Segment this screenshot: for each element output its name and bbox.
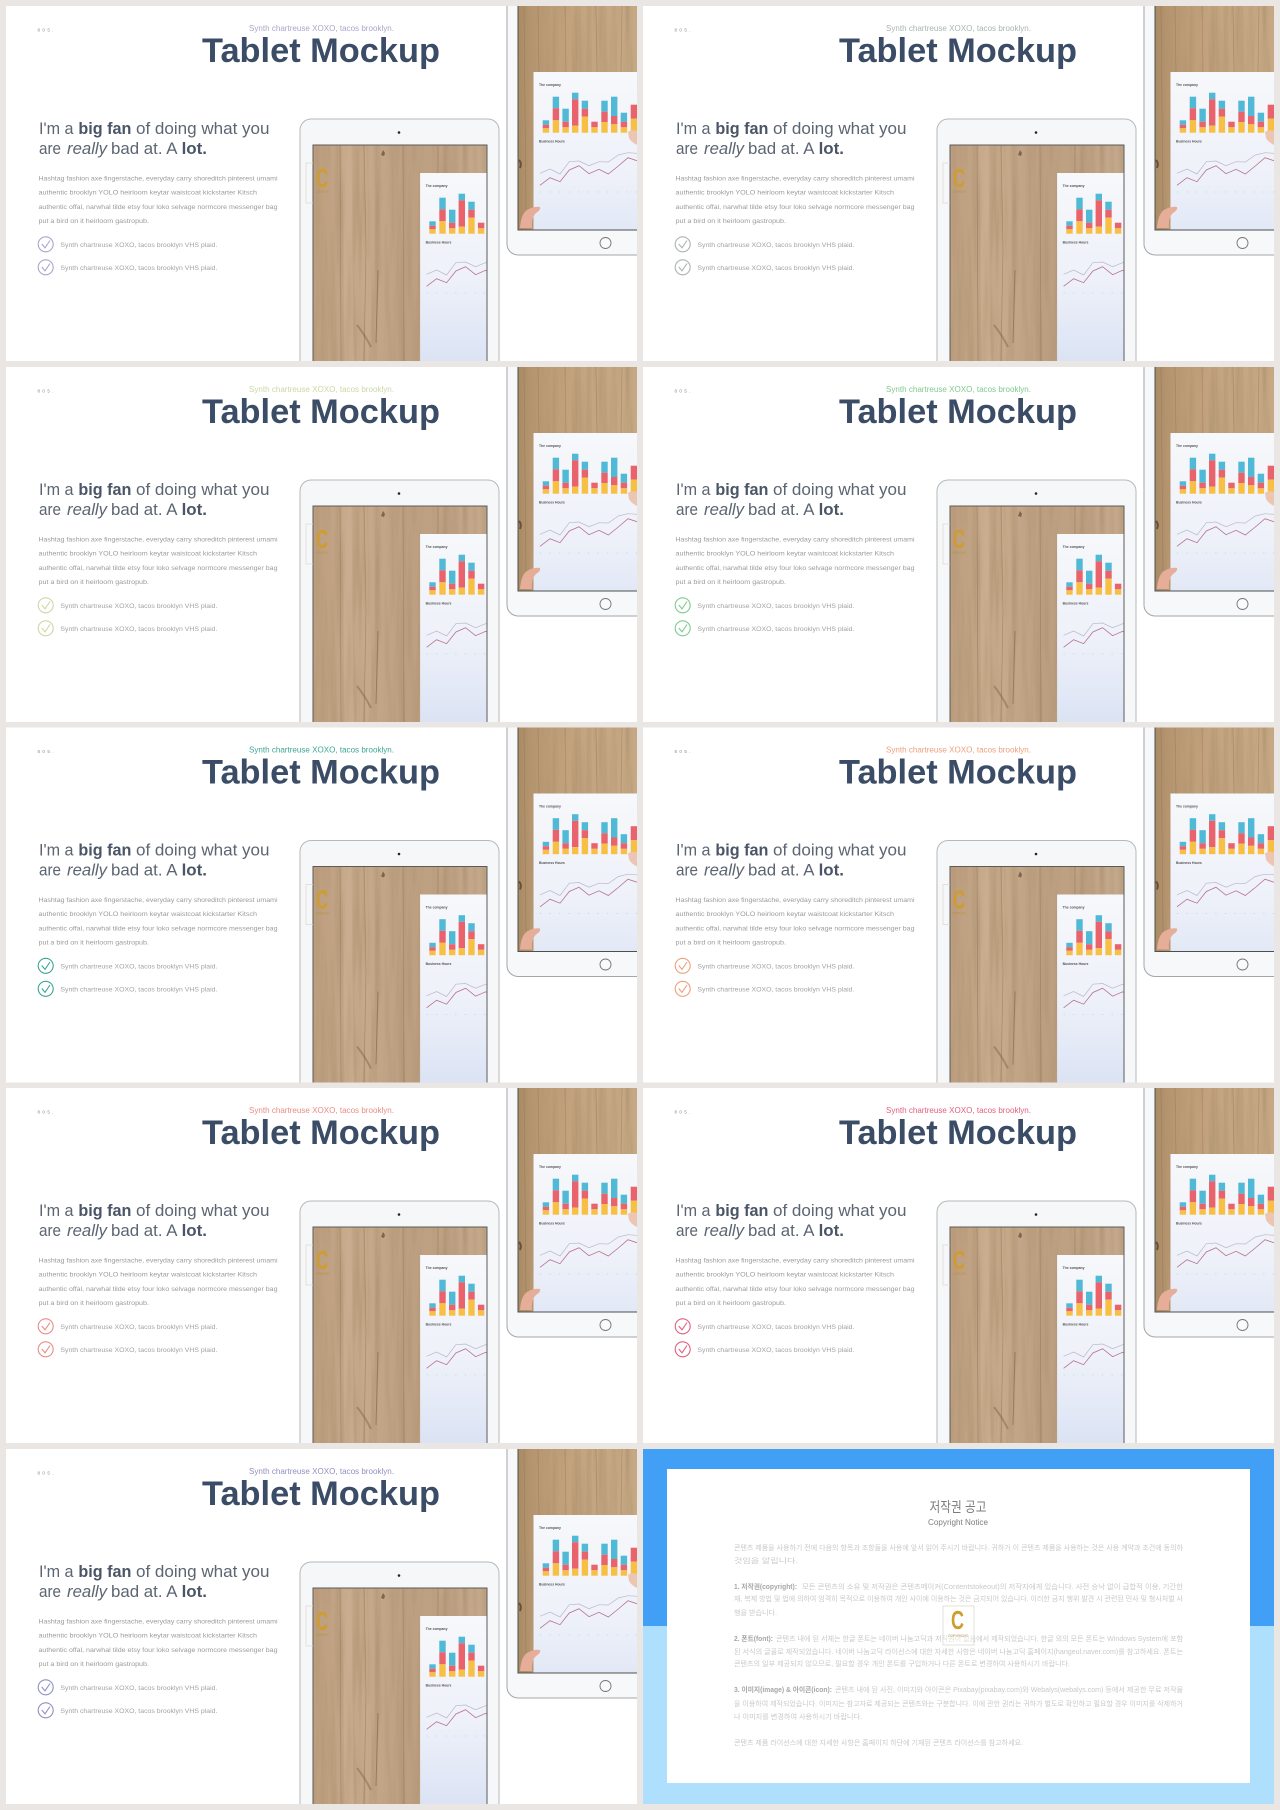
heading: big fan bbox=[715, 1201, 768, 1220]
body text: authentic offal, narwhal tilde etsy four loko selvage normcore messenger bag bbox=[38, 204, 278, 211]
slide background bbox=[6, 6, 637, 361]
heading: I'm a bbox=[676, 119, 711, 138]
heading bbox=[39, 840, 270, 880]
slide background bbox=[6, 1449, 637, 1804]
heading: are bbox=[39, 1582, 61, 1601]
body text: authentic brooklyn YOLO heirloom keytar waistcoat kickstarter Kitsch bbox=[676, 1272, 894, 1278]
watermark: COPYRIGHT bbox=[315, 189, 329, 194]
body text bbox=[38, 536, 278, 586]
heading: big fan bbox=[78, 119, 131, 138]
slide background bbox=[6, 1088, 637, 1443]
heading: lot. bbox=[819, 139, 844, 158]
heading: are bbox=[39, 139, 61, 158]
heading: bad at. A bbox=[748, 1221, 815, 1240]
page number: 805. bbox=[38, 1470, 54, 1476]
checklist item 2 bbox=[675, 1342, 855, 1357]
body text: authentic brooklyn YOLO heirloom keytar waistcoat kickstarter Kitsch bbox=[38, 190, 257, 196]
page number: 805. bbox=[674, 28, 690, 32]
body text: Hashtag fashion axe fingerstache, everyday carry shoreditch pinterest umami bbox=[38, 1258, 278, 1264]
subtitle: Synth chartreuse XOXO, tacos brooklyn. bbox=[249, 1105, 394, 1115]
checklist item 1: Synth chartreuse XOXO, tacos brooklyn VHS plaid. bbox=[697, 242, 855, 249]
watermark bbox=[943, 524, 966, 564]
slide background bbox=[643, 1088, 1274, 1443]
checklist item 2 bbox=[675, 260, 855, 275]
heading: bad at. A bbox=[111, 1582, 178, 1601]
title: Tablet Mockup bbox=[202, 1475, 440, 1513]
heading: lot. bbox=[819, 500, 844, 519]
page number: 805. bbox=[38, 28, 54, 32]
title: Tablet Mockup bbox=[839, 393, 1077, 431]
heading: bad at. A bbox=[111, 139, 178, 158]
checklist item 2 bbox=[38, 1342, 218, 1357]
heading: of doing what you bbox=[773, 119, 906, 138]
body text: Hashtag fashion axe fingerstache, everyday carry shoreditch pinterest umami bbox=[38, 1618, 278, 1626]
heading bbox=[676, 840, 906, 880]
heading: of doing what you bbox=[773, 480, 906, 499]
body text: put a bird on it heirloom gastropub. bbox=[676, 940, 786, 946]
heading: lot. bbox=[182, 500, 207, 519]
heading: of doing what you bbox=[136, 1201, 270, 1220]
notice subtitle: Copyright Notice bbox=[928, 1517, 988, 1527]
section 1 copyright: 행을 받습니다. bbox=[734, 1608, 777, 1617]
checklist item 1 bbox=[38, 1680, 218, 1695]
body text bbox=[38, 176, 278, 225]
checklist item 1 bbox=[38, 237, 218, 252]
body text: Hashtag fashion axe fingerstache, everyday carry shoreditch pinterest umami bbox=[38, 897, 278, 904]
watermark: C bbox=[951, 1605, 964, 1635]
watermark: COPYRIGHT bbox=[315, 910, 329, 916]
body text: put a bird on it heirloom gastropub. bbox=[676, 579, 786, 586]
body text bbox=[676, 897, 915, 946]
heading: really bbox=[704, 500, 745, 519]
checklist item 2: Synth chartreuse XOXO, tacos brooklyn VHS plaid. bbox=[60, 986, 218, 994]
body text: authentic brooklyn YOLO heirloom keytar waistcoat kickstarter Kitsch bbox=[38, 550, 257, 558]
watermark: C bbox=[953, 1245, 965, 1275]
watermark bbox=[943, 163, 966, 203]
slide background bbox=[643, 367, 1274, 722]
heading bbox=[39, 480, 270, 519]
panel: slide 5 bbox=[6, 728, 637, 1082]
title: Tablet Mockup bbox=[202, 393, 440, 431]
body text: authentic brooklyn YOLO heirloom keytar waistcoat kickstarter Kitsch bbox=[676, 911, 894, 918]
heading: big fan bbox=[78, 1201, 131, 1220]
checklist item 2: Synth chartreuse XOXO, tacos brooklyn VHS plaid. bbox=[60, 265, 218, 272]
watermark bbox=[306, 1245, 329, 1285]
body text: Hashtag fashion axe fingerstache, everyday carry shoreditch pinterest umami bbox=[38, 176, 278, 182]
title: Tablet Mockup bbox=[202, 754, 440, 792]
title: Tablet Mockup bbox=[839, 32, 1077, 70]
heading: big fan bbox=[78, 1562, 131, 1581]
heading: big fan bbox=[715, 119, 768, 138]
tablet mockups bbox=[937, 6, 1274, 361]
body text: Hashtag fashion axe fingerstache, everyday carry shoreditch pinterest umami bbox=[676, 1258, 915, 1264]
body text: authentic offal, narwhal tilde etsy four loko selvage normcore messenger bag bbox=[676, 565, 915, 572]
intro paragraph: 콘텐츠 제품을 사용하기 전에 다음의 항목과 조항들을 사용에 앞서 읽어 주시기 바랍니다. 귀하가 이 콘텐츠 제품을 사용하는 것은 사용 계약과 조건에 동의하 bbox=[734, 1543, 1184, 1552]
tablet mockups bbox=[300, 367, 637, 722]
checklist item 2: Synth chartreuse XOXO, tacos brooklyn VHS plaid. bbox=[60, 1708, 218, 1715]
heading: really bbox=[704, 860, 745, 880]
panel: slide 8 bbox=[643, 1088, 1274, 1443]
checklist item 2: Synth chartreuse XOXO, tacos brooklyn VHS plaid. bbox=[697, 626, 855, 633]
checklist item 2 bbox=[675, 981, 855, 996]
checklist item 1: Synth chartreuse XOXO, tacos brooklyn VHS plaid. bbox=[697, 603, 855, 610]
body text: Hashtag fashion axe fingerstache, everyday carry shoreditch pinterest umami bbox=[676, 897, 915, 904]
watermark: C bbox=[316, 524, 328, 554]
intro paragraph: 것임을 알립니다. bbox=[734, 1556, 798, 1565]
heading: lot. bbox=[182, 139, 207, 158]
heading: I'm a bbox=[39, 480, 74, 499]
heading: lot. bbox=[819, 860, 844, 880]
heading: bad at. A bbox=[111, 500, 178, 519]
heading: of doing what you bbox=[136, 840, 270, 860]
watermark bbox=[306, 1606, 329, 1646]
light blue lower background bbox=[643, 1626, 1274, 1804]
title: Tablet Mockup bbox=[202, 32, 440, 70]
body text: authentic offal, narwhal tilde etsy four loko selvage normcore messenger bag bbox=[38, 565, 278, 572]
subtitle: Synth chartreuse XOXO, tacos brooklyn. bbox=[886, 23, 1031, 33]
heading: are bbox=[676, 139, 698, 158]
checklist item 1: Synth chartreuse XOXO, tacos brooklyn VHS plaid. bbox=[60, 963, 218, 970]
body text: put a bird on it heirloom gastropub. bbox=[38, 218, 149, 225]
slide background bbox=[643, 728, 1274, 1082]
watermark: COPYRIGHT bbox=[315, 1632, 329, 1637]
watermark bbox=[306, 524, 329, 564]
section 1 copyright: 재, 복제 방법 및 법에 의하여 엄격히 목적으로 이용하여 개인 사이에 이용하는 것은 금지되어 있습니다. 이러한 금지 행위 발견 시 관련된 민사 및 형사처벌 사 bbox=[734, 1594, 1184, 1603]
watermark: C bbox=[316, 1606, 328, 1636]
tablet mockups bbox=[937, 728, 1274, 1082]
body text: authentic offal, narwhal tilde etsy four loko selvage normcore messenger bag bbox=[676, 204, 915, 211]
checklist item 2: Synth chartreuse XOXO, tacos brooklyn VHS plaid. bbox=[697, 986, 855, 994]
heading: really bbox=[704, 139, 745, 158]
heading: big fan bbox=[715, 840, 768, 860]
heading: really bbox=[704, 1221, 745, 1240]
body text: authentic offal, narwhal tilde etsy four loko selvage normcore messenger bag bbox=[676, 1286, 915, 1293]
subtitle: Synth chartreuse XOXO, tacos brooklyn. bbox=[886, 1105, 1031, 1115]
body text: authentic offal, narwhal tilde etsy four loko selvage normcore messenger bag bbox=[676, 926, 915, 932]
section 2 font: 2. 폰트(font): bbox=[734, 1635, 773, 1643]
heading bbox=[39, 1201, 270, 1240]
heading: bad at. A bbox=[111, 860, 178, 880]
checklist item 1 bbox=[675, 1319, 855, 1334]
white card bbox=[667, 1469, 1250, 1783]
watermark: COPYRIGHT bbox=[952, 910, 966, 916]
watermark: C bbox=[316, 884, 328, 914]
slide background bbox=[6, 367, 637, 722]
watermark bbox=[306, 884, 329, 924]
panel: slide 1 bbox=[6, 6, 637, 361]
subtitle: Synth chartreuse XOXO, tacos brooklyn. bbox=[249, 744, 394, 754]
body text: Hashtag fashion axe fingerstache, everyday carry shoreditch pinterest umami bbox=[38, 536, 278, 544]
checklist item 1 bbox=[675, 237, 855, 252]
heading: lot. bbox=[182, 860, 207, 880]
watermark bbox=[943, 1605, 974, 1645]
page number: 805. bbox=[674, 1110, 690, 1114]
heading: of doing what you bbox=[136, 1562, 270, 1581]
heading: really bbox=[67, 1221, 108, 1240]
section 3 image and icon bbox=[734, 1685, 1184, 1721]
checklist item 1: Synth chartreuse XOXO, tacos brooklyn VHS plaid. bbox=[60, 1324, 218, 1331]
body text: authentic brooklyn YOLO heirloom keytar waistcoat kickstarter Kitsch bbox=[38, 1632, 257, 1640]
watermark: COPYRIGHT bbox=[315, 1271, 329, 1276]
subtitle: Synth chartreuse XOXO, tacos brooklyn. bbox=[249, 23, 394, 33]
heading: really bbox=[67, 860, 108, 880]
checklist item 2 bbox=[38, 621, 218, 636]
heading: I'm a bbox=[39, 1201, 74, 1220]
heading: I'm a bbox=[39, 840, 74, 860]
heading bbox=[39, 119, 270, 158]
watermark: C bbox=[953, 524, 965, 554]
heading: I'm a bbox=[39, 119, 74, 138]
closing line: 콘텐츠 제품 라이선스에 대한 자세한 사항은 홈페이지 하단에 기재된 콘텐츠 라이선스를 참고하세요. bbox=[734, 1738, 1023, 1747]
checklist item 1: Synth chartreuse XOXO, tacos brooklyn VHS plaid. bbox=[60, 1685, 218, 1692]
watermark: C bbox=[953, 163, 965, 193]
heading bbox=[676, 1201, 906, 1240]
heading: really bbox=[67, 139, 108, 158]
section 3 image and icon: 나 이미지를 변경하여 사용하시기 바랍니다. bbox=[734, 1712, 862, 1721]
title: Tablet Mockup bbox=[839, 1114, 1077, 1152]
checklist item 2 bbox=[675, 621, 855, 636]
checklist item 2 bbox=[38, 1703, 218, 1718]
body text: Hashtag fashion axe fingerstache, everyday carry shoreditch pinterest umami bbox=[676, 176, 915, 182]
body text: put a bird on it heirloom gastropub. bbox=[676, 218, 786, 225]
intro paragraph bbox=[734, 1543, 1184, 1565]
blue upper background bbox=[643, 1449, 1274, 1626]
checklist item 1 bbox=[38, 958, 218, 973]
checklist item 1 bbox=[675, 598, 855, 613]
checklist item 2: Synth chartreuse XOXO, tacos brooklyn VHS plaid. bbox=[60, 626, 218, 633]
heading: I'm a bbox=[676, 1201, 711, 1220]
watermark: COPYRIGHT bbox=[952, 550, 966, 555]
subtitle: Synth chartreuse XOXO, tacos brooklyn. bbox=[249, 384, 394, 394]
body text: authentic offal, narwhal tilde etsy four loko selvage normcore messenger bag bbox=[38, 926, 278, 932]
panel: slide 7 bbox=[6, 1088, 637, 1443]
body text bbox=[38, 1618, 278, 1668]
watermark: C bbox=[316, 1245, 328, 1275]
page number: 805. bbox=[674, 749, 690, 754]
subtitle: Synth chartreuse XOXO, tacos brooklyn. bbox=[249, 1466, 394, 1476]
tablet mockups bbox=[937, 1088, 1274, 1443]
body text: authentic offal, narwhal tilde etsy four loko selvage normcore messenger bag bbox=[38, 1286, 278, 1293]
section 2 font bbox=[734, 1634, 1184, 1668]
heading bbox=[39, 1562, 270, 1601]
body text: authentic brooklyn YOLO heirloom keytar waistcoat kickstarter Kitsch bbox=[38, 911, 257, 918]
heading: are bbox=[676, 1221, 698, 1240]
section 3 image and icon: 콘텐츠 내에 된 사진, 이미지와 아이콘은 Pixabay(pixabay.com)와 Webalys(webalys.com) 등에서 제공한 무료 저작물 bbox=[835, 1685, 1184, 1694]
slide background bbox=[6, 728, 637, 1082]
subtitle: Synth chartreuse XOXO, tacos brooklyn. bbox=[886, 744, 1031, 754]
checklist item 2: Synth chartreuse XOXO, tacos brooklyn VHS plaid. bbox=[60, 1347, 218, 1354]
watermark: C bbox=[953, 884, 965, 914]
heading: I'm a bbox=[39, 1562, 74, 1581]
body text bbox=[38, 897, 278, 946]
panel: slide 9 bbox=[6, 1449, 637, 1804]
panel: slide 2 bbox=[643, 6, 1274, 361]
heading: big fan bbox=[715, 480, 768, 499]
body text: put a bird on it heirloom gastropub. bbox=[38, 1661, 149, 1668]
body text: authentic brooklyn YOLO heirloom keytar waistcoat kickstarter Kitsch bbox=[676, 190, 894, 196]
checklist item 1: Synth chartreuse XOXO, tacos brooklyn VHS plaid. bbox=[60, 603, 218, 610]
panel: slide 3 bbox=[6, 367, 637, 722]
page number: 805. bbox=[38, 1110, 54, 1114]
watermark: COPYRIGHT bbox=[315, 550, 329, 555]
heading: bad at. A bbox=[111, 1221, 178, 1240]
body text: put a bird on it heirloom gastropub. bbox=[38, 1300, 149, 1307]
heading: lot. bbox=[182, 1221, 207, 1240]
watermark: COPYRIGHT bbox=[952, 189, 966, 194]
checklist item 1: Synth chartreuse XOXO, tacos brooklyn VHS plaid. bbox=[697, 1324, 855, 1331]
body text: authentic brooklyn YOLO heirloom keytar waistcoat kickstarter Kitsch bbox=[676, 550, 894, 558]
checklist item 2 bbox=[38, 981, 218, 996]
watermark bbox=[943, 884, 966, 924]
slide background bbox=[643, 6, 1274, 361]
body text: Hashtag fashion axe fingerstache, everyday carry shoreditch pinterest umami bbox=[676, 536, 915, 544]
panel: slide 6 bbox=[643, 728, 1274, 1082]
checklist item 1 bbox=[675, 958, 855, 973]
heading: I'm a bbox=[676, 840, 711, 860]
body text: authentic offal, narwhal tilde etsy four loko selvage normcore messenger bag bbox=[38, 1647, 278, 1654]
heading: are bbox=[39, 500, 61, 519]
checklist item 1: Synth chartreuse XOXO, tacos brooklyn VHS plaid. bbox=[697, 963, 855, 970]
notice title: 저작권 공고 bbox=[930, 1499, 987, 1515]
tablet mockups bbox=[300, 1088, 637, 1443]
heading: are bbox=[676, 860, 698, 880]
watermark: C bbox=[316, 163, 328, 193]
page number: 805. bbox=[674, 388, 690, 394]
body text bbox=[676, 1258, 915, 1307]
page number: 805. bbox=[38, 388, 54, 394]
section 3 image and icon: 을 이용하여 제작되었습니다. 이미지는 참고자료 제공되는 콘텐츠와는 구분합니다. 이에 관한 권리는 귀하가 별도로 확인하고 필요할 경우 이미지를 삭제하거 bbox=[734, 1699, 1183, 1708]
checklist item 1 bbox=[38, 1319, 218, 1334]
section 2 font: 된 서식의 글꼴로 제작되었습니다. 네이버 나눔고딕 라이선스에 대한 자세한 사항은 네이버 나눔고딕 홈페이지(hangeul.naver.com)를 참고하세요. 폰트는 bbox=[734, 1647, 1184, 1656]
section 1 copyright: 1. 저작권(copyright): bbox=[734, 1582, 797, 1591]
tablet mockups bbox=[300, 6, 637, 361]
heading: bad at. A bbox=[748, 860, 815, 880]
tablet mockups bbox=[937, 367, 1274, 722]
subtitle: Synth chartreuse XOXO, tacos brooklyn. bbox=[886, 384, 1031, 394]
tablet mockups bbox=[300, 728, 637, 1082]
body text: authentic brooklyn YOLO heirloom keytar waistcoat kickstarter Kitsch bbox=[38, 1272, 257, 1278]
heading: are bbox=[39, 1221, 61, 1240]
body text: put a bird on it heirloom gastropub. bbox=[676, 1300, 786, 1307]
heading: big fan bbox=[78, 480, 131, 499]
heading: bad at. A bbox=[748, 139, 815, 158]
checklist item 2: Synth chartreuse XOXO, tacos brooklyn VHS plaid. bbox=[697, 1347, 855, 1354]
heading: bad at. A bbox=[748, 500, 815, 519]
section 1 copyright: 모든 콘텐츠의 소유 및 저작권은 콘텐츠메이커(Contentstokeout)의 저작자에게 있습니다. 사전 승낙 없이 급합적 이용, 기간한 bbox=[802, 1582, 1184, 1591]
heading: I'm a bbox=[676, 480, 711, 499]
body text bbox=[38, 1258, 278, 1307]
heading: really bbox=[67, 500, 108, 519]
checklist item 1 bbox=[38, 598, 218, 613]
checklist item 1: Synth chartreuse XOXO, tacos brooklyn VHS plaid. bbox=[60, 242, 218, 249]
heading: of doing what you bbox=[773, 1201, 906, 1220]
section 2 font: 콘텐츠의 일부 제공되지 않으므로, 필요할 경우 개인 폰트를 구입하거나 다른 폰트로 변경하여 사용하시기 바랍니다. bbox=[734, 1659, 1070, 1668]
checklist item 2: Synth chartreuse XOXO, tacos brooklyn VHS plaid. bbox=[697, 265, 855, 272]
heading: lot. bbox=[182, 1582, 207, 1601]
body text: put a bird on it heirloom gastropub. bbox=[38, 579, 149, 586]
heading: really bbox=[67, 1582, 108, 1601]
watermark bbox=[306, 163, 329, 203]
watermark bbox=[943, 1245, 966, 1285]
heading: big fan bbox=[78, 840, 131, 860]
tablet mockups bbox=[300, 1449, 637, 1804]
title: Tablet Mockup bbox=[202, 1114, 440, 1152]
heading: of doing what you bbox=[773, 840, 906, 860]
heading: of doing what you bbox=[136, 119, 270, 138]
page number: 805. bbox=[38, 749, 54, 754]
heading bbox=[676, 119, 906, 158]
heading bbox=[676, 480, 906, 519]
checklist item 2 bbox=[38, 260, 218, 275]
body text bbox=[676, 176, 915, 225]
panel: copyright notice bbox=[643, 1449, 1274, 1804]
body text bbox=[676, 536, 915, 586]
section 1 copyright bbox=[734, 1582, 1184, 1617]
watermark: COPYRIGHT bbox=[948, 1633, 968, 1638]
watermark: COPYRIGHT bbox=[952, 1271, 966, 1276]
heading: lot. bbox=[819, 1221, 844, 1240]
section 3 image and icon: 3. 이미지(image) & 아이콘(icon): bbox=[734, 1685, 832, 1694]
section 2 font: 콘텐츠 내에 된 서체는 한글 폰트는 네이버 나눔고딕과 저작권이 없음에서 제작되었습니다. 한글 외의 모든 폰트는 Windows System에 포함 bbox=[776, 1634, 1184, 1643]
title: Tablet Mockup bbox=[839, 754, 1077, 792]
body text: put a bird on it heirloom gastropub. bbox=[38, 940, 149, 946]
heading: of doing what you bbox=[136, 480, 270, 499]
heading: are bbox=[676, 500, 698, 519]
heading: are bbox=[39, 860, 61, 880]
panel: slide 4 bbox=[643, 367, 1274, 722]
